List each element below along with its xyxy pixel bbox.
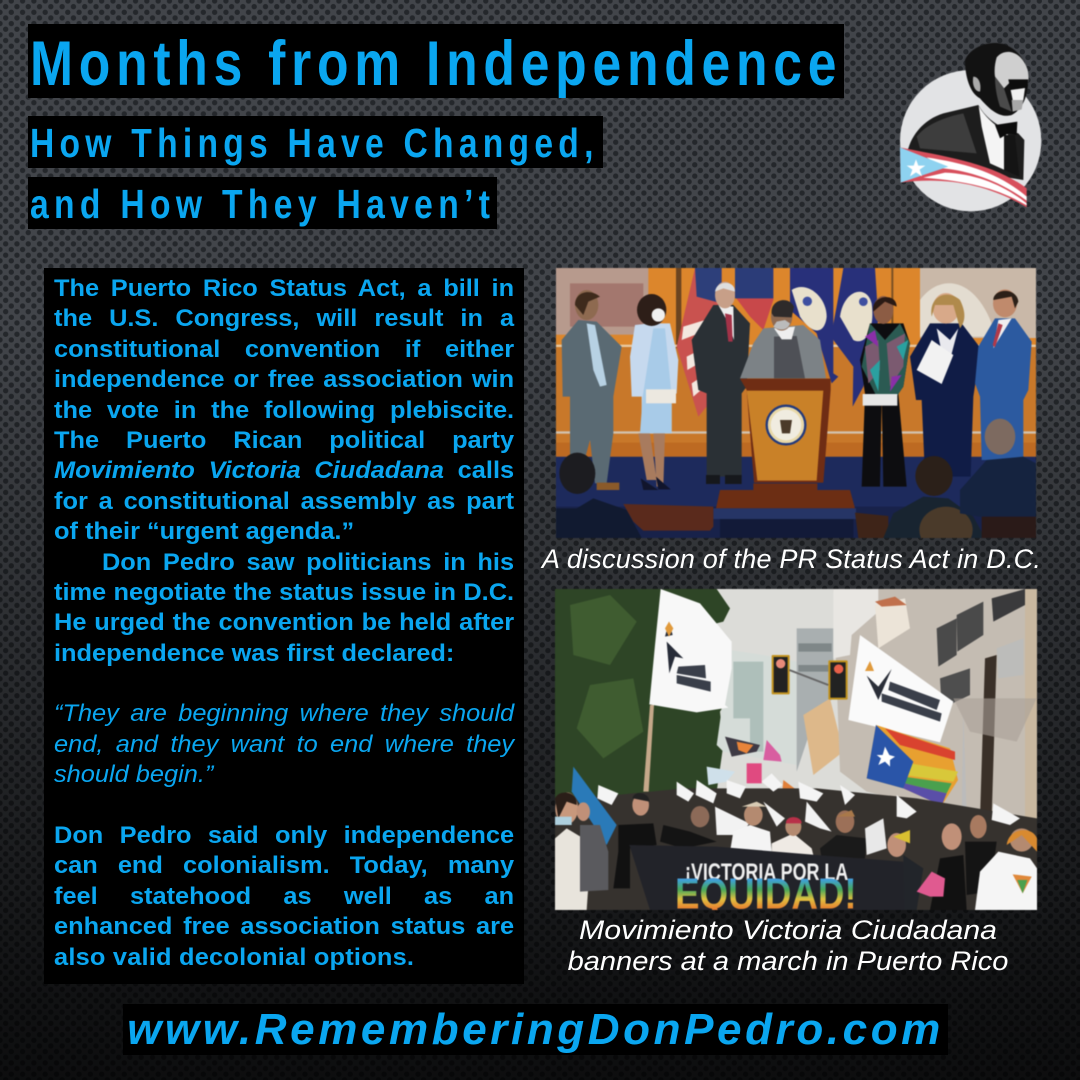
body copy: Don Pedro said only independence [54, 823, 514, 849]
body copy: can end colonialism. Today, many [54, 853, 514, 879]
US flags [677, 268, 722, 417]
traffic lights [772, 655, 790, 694]
audience [556, 498, 642, 538]
body copy: constitutional convention if either [54, 337, 514, 363]
subtitle line one: How Things Have Changed, [30, 120, 599, 166]
body copy: Don Pedro saw politicians in his [102, 550, 514, 576]
person 3 dark suit [692, 305, 750, 477]
panel: body text [44, 268, 524, 984]
body copy: The Puerto Rico Status Act, a bill in [54, 276, 514, 302]
footer website URL: www.RememberingDonPedro.com [127, 1005, 944, 1054]
body copy: time negotiate the status issue in D.C. [54, 580, 514, 606]
speaker [740, 325, 826, 378]
trees [555, 589, 737, 798]
photo: march in Puerto Rico [554, 588, 1038, 911]
caption: march [568, 915, 1008, 976]
body copy: enhanced free association status are [54, 914, 514, 940]
photo: press conference in D.C. [555, 267, 1037, 538]
body copy [54, 276, 516, 971]
person 1 gray suit [562, 320, 622, 483]
body copy: end, and they want to end where they [54, 732, 514, 758]
right buildings [833, 589, 1037, 818]
icon: portrait of Don Pedro with Puerto Rican flag [899, 42, 1042, 212]
title: Months from Independence [30, 29, 842, 99]
body copy: of their “urgent agenda.” [54, 519, 354, 545]
body copy: independence was first declared: [54, 641, 454, 667]
body copy: independence or free association win [54, 367, 514, 393]
body copy: The Puerto Rican political party [54, 428, 514, 454]
subtitle line two: and How They Haven’t [30, 181, 495, 227]
caption: press conference: A discussion of the PR Status Act in D.C. [542, 544, 1041, 574]
rainbow PR flag [867, 725, 958, 806]
person 7 navy suit [910, 323, 981, 477]
white flag left [643, 705, 654, 792]
person 2 light blue [630, 323, 678, 433]
person 8 blue suit [975, 318, 1032, 460]
towers [717, 650, 797, 765]
body copy: should begin.” [54, 762, 213, 788]
body copy: the U.S. Congress, will result in a [54, 306, 514, 332]
caption: march: banners at a march in Puerto Rico [568, 946, 1008, 976]
white flag right [848, 635, 953, 742]
person 6 colourful jacket [860, 323, 910, 487]
body copy: the vote in the following plebiscite. [54, 398, 514, 424]
body copy: also valid decolonial options. [54, 945, 414, 971]
crowd base [555, 788, 1037, 910]
body copy: Movimiento Victoria Ciudadana calls [54, 458, 514, 484]
body copy: for a constitutional assembly as part [54, 489, 514, 515]
body copy: feel statehood as well as an [54, 884, 514, 910]
body copy: He urged the convention be held after [54, 610, 514, 636]
podium [740, 379, 831, 483]
body copy: “They are beginning where they should [54, 701, 514, 727]
banner [629, 845, 904, 910]
caption: march: Movimiento Victoria Ciudadana [579, 915, 997, 945]
photo: march in Puerto Rico: ¡VICTORIA POR LA [685, 859, 848, 886]
marchers [555, 828, 590, 910]
background crowd banners [725, 737, 760, 757]
